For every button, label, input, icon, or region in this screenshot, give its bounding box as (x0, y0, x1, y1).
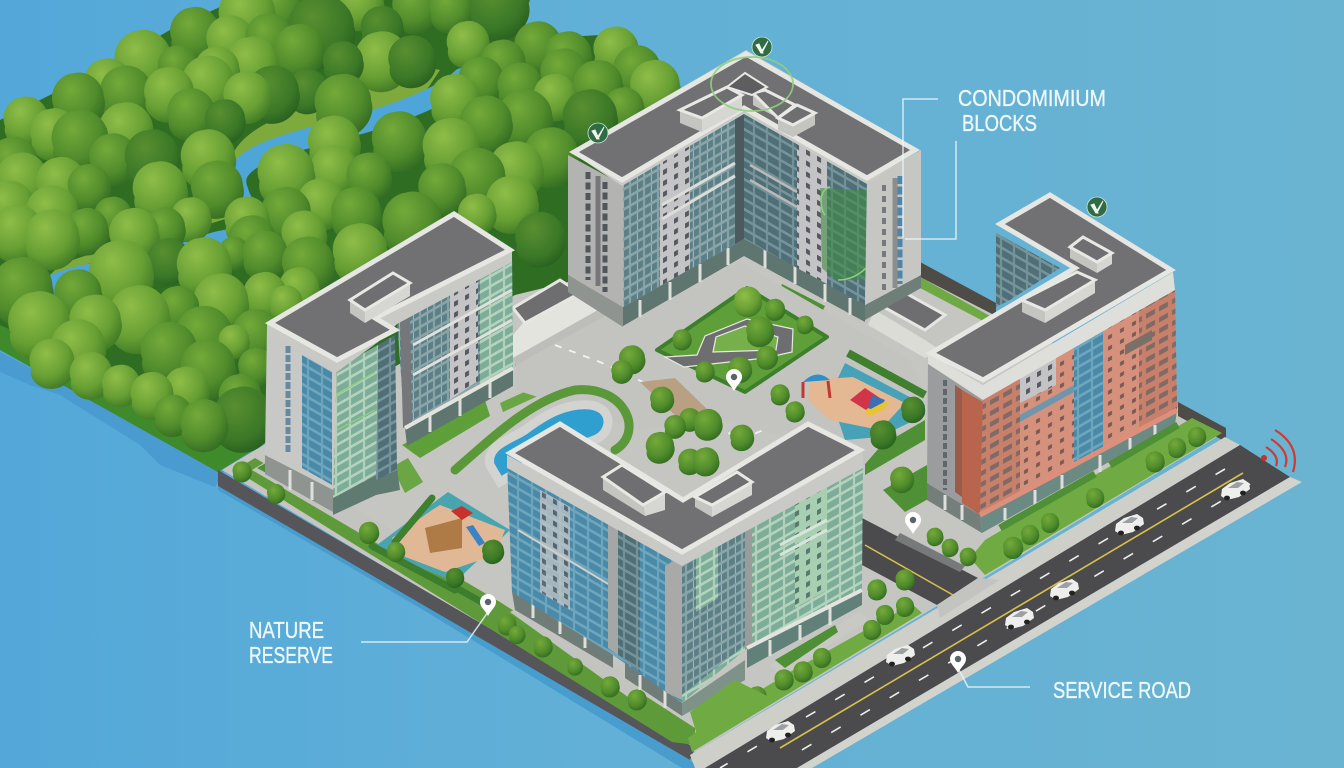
lane dashes (720, 469, 1225, 768)
west face (265, 325, 337, 490)
perimeter trees and hedges (233, 427, 1206, 715)
east face (865, 150, 921, 305)
connector bridge: right blocks (868, 290, 945, 358)
carriageway (705, 445, 1290, 768)
play canopy (803, 374, 830, 382)
roof band (267, 250, 512, 372)
connector bridge: left blocks (513, 280, 607, 365)
brick facade (980, 290, 1177, 515)
right hedge (848, 353, 925, 395)
condominium block: right brick (927, 195, 1178, 533)
green facade highlight (820, 187, 869, 280)
upper sidewalk (690, 437, 1240, 768)
hedge under block (1000, 425, 1178, 528)
reserve boundary wall (218, 470, 695, 760)
courtyard face east wing (744, 112, 867, 305)
label text: CONDOMIMIUM (958, 85, 1106, 111)
site ground (222, 240, 1225, 752)
leader and pin (950, 651, 1030, 687)
roof (270, 214, 510, 360)
forest shadow on water (0, 352, 225, 487)
label: nature reserve (249, 594, 496, 668)
left playground (377, 492, 510, 582)
blue glass section (1074, 329, 1103, 466)
lawn under block (690, 680, 775, 745)
cars (766, 479, 1250, 742)
roof highlight ring (711, 57, 793, 111)
ground floor columns (568, 238, 921, 327)
pool (455, 390, 629, 482)
roof band (507, 452, 863, 566)
roof plant boxes (603, 465, 752, 517)
roof plant boxes (680, 73, 815, 137)
garden path (665, 319, 793, 367)
garden lawn (713, 326, 778, 352)
walkway trees (611, 345, 805, 476)
south face (397, 255, 513, 428)
label: condominium blocks (903, 85, 1106, 239)
label: service road (950, 651, 1191, 703)
roof (574, 54, 915, 180)
west windows (943, 380, 947, 490)
lawn patches around blocks (257, 270, 930, 512)
roof plant box (350, 273, 410, 323)
leader lines (903, 99, 956, 239)
roof (510, 424, 860, 552)
west face (507, 462, 682, 703)
bay (333, 345, 378, 498)
ground floor (512, 590, 862, 716)
roadside lawn (688, 418, 1222, 752)
label text: BLOCKS (962, 110, 1037, 136)
nature reserve forest (0, 0, 681, 487)
condominium block: rear centre (568, 50, 921, 327)
central garden (657, 286, 827, 392)
label text: NATURE (249, 617, 324, 643)
condominium block: left (265, 214, 513, 515)
ground floor (927, 410, 1177, 533)
lawn strip beside wall (235, 458, 695, 745)
light brick tower (1103, 309, 1139, 451)
lower pavement (797, 477, 1302, 768)
east face windows (882, 185, 886, 295)
south face (682, 455, 863, 703)
brick base band (980, 410, 1177, 515)
side road (862, 518, 1000, 618)
wooden play frame (425, 518, 462, 553)
rear wing glass (996, 233, 1060, 307)
signal arcs (1261, 430, 1295, 472)
west face (568, 155, 623, 307)
back boundary wall (920, 262, 1226, 442)
service road (690, 437, 1302, 768)
label text: RESERVE (249, 642, 333, 668)
river (52, 78, 462, 285)
label text: SERVICE ROAD (1053, 677, 1191, 703)
central courtyard plaza and paths (516, 262, 925, 470)
west pillar (608, 518, 618, 655)
forest ground (0, 0, 672, 472)
west face windows (588, 172, 605, 292)
roof band (571, 50, 918, 186)
west face (927, 360, 983, 515)
condominium block: front (507, 424, 863, 745)
water shadow below wall (218, 486, 698, 768)
colourful climbing frame (850, 388, 888, 416)
roof plant boxes (1022, 237, 1112, 323)
leader and pin (361, 594, 496, 642)
ground floor (265, 368, 513, 515)
west windows (286, 346, 290, 452)
garden trees (673, 286, 814, 383)
forest trees (0, 0, 681, 453)
blue slide (466, 525, 485, 546)
walkway beside wall (252, 458, 650, 702)
map pins (726, 369, 921, 534)
courtyard face west wing (623, 112, 744, 307)
red roof (451, 506, 473, 520)
right playground (803, 363, 925, 493)
forest lawn near the water (0, 325, 262, 472)
green facade edge (510, 470, 518, 592)
yellow centre line (780, 473, 1243, 748)
roof (931, 195, 1171, 380)
leaf badges (588, 37, 1107, 217)
roof band (928, 272, 1175, 400)
light brick bay (1020, 345, 1074, 495)
